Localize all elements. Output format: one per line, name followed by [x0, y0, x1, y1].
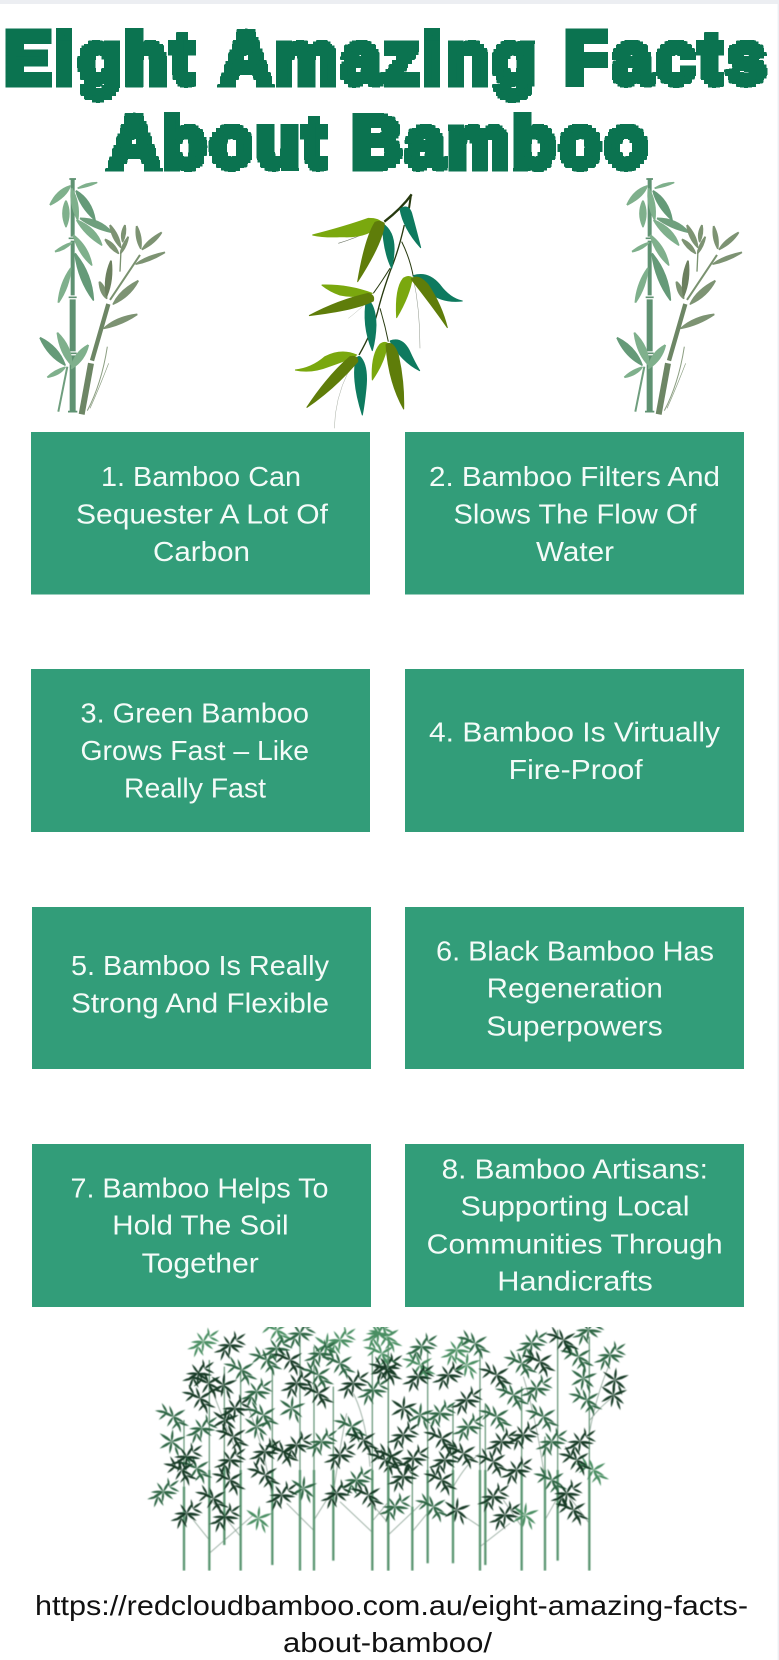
title: Eight	[5, 19, 198, 99]
panel: fact 7	[32, 1144, 371, 1307]
panel: fact 2: Water	[536, 536, 614, 567]
title: Bamboo	[352, 103, 651, 183]
title	[5, 19, 770, 183]
panel: fact 8: Handicrafts	[497, 1266, 653, 1297]
icon: right bamboo stalks	[617, 178, 742, 414]
panel: fact 7: Hold The Soil	[112, 1210, 289, 1241]
panel: fact 3: Really Fast	[124, 773, 266, 804]
panel: fact 6: Regeneration	[487, 973, 663, 1004]
icon: left bamboo stalks	[40, 178, 165, 414]
panel: fact 1: Carbon	[153, 536, 250, 567]
panel: fact 5: 5. Bamboo Is Really	[71, 950, 329, 981]
panel: fact 8: 8. Bamboo Artisans:	[442, 1153, 708, 1184]
panel: fact 7: 7. Bamboo Helps To	[70, 1172, 328, 1203]
panel: fact 7: Together	[142, 1247, 259, 1278]
panel: fact 8: Supporting Local	[460, 1191, 690, 1222]
illustration: bamboo grove	[147, 1316, 629, 1571]
panel: fact 2: Slows The Flow Of	[454, 498, 697, 529]
panel: fact 6: 6. Black Bamboo Has	[436, 935, 714, 966]
panel: fact 5	[32, 907, 371, 1069]
panel: fact 1	[31, 432, 370, 594]
panel: fact 6: Superpowers	[486, 1010, 663, 1041]
source URL: https://redcloudbamboo.com.au/eight-amazing-facts-	[35, 1590, 748, 1621]
source URL: about-bamboo/	[283, 1627, 492, 1658]
title: Amazing	[221, 19, 539, 99]
panel: fact 8: Communities Through	[427, 1228, 723, 1259]
panel: fact 2	[405, 432, 744, 594]
panel: fact 3: Grows Fast – Like	[80, 735, 309, 766]
panel: fact 3	[31, 669, 370, 832]
icon: central bamboo branch	[295, 194, 462, 428]
panel: fact 6	[405, 907, 744, 1069]
title: Facts	[565, 19, 770, 99]
panel: fact 8	[405, 1144, 744, 1307]
panel: fact 1: Sequester A Lot Of	[76, 498, 328, 529]
source URL	[35, 1590, 748, 1658]
title: About	[109, 103, 330, 183]
panel: fact 4: 4. Bamboo Is Virtually	[429, 717, 720, 748]
panel: fact 2: 2. Bamboo Filters And	[429, 461, 720, 492]
panel: fact 3: 3. Green Bamboo	[80, 698, 309, 729]
panel: fact 4: Fire-Proof	[509, 754, 643, 785]
panel: fact 5: Strong And Flexible	[71, 987, 329, 1018]
panel: fact 1: 1. Bamboo Can	[101, 461, 301, 492]
panel: fact 4	[405, 669, 744, 832]
